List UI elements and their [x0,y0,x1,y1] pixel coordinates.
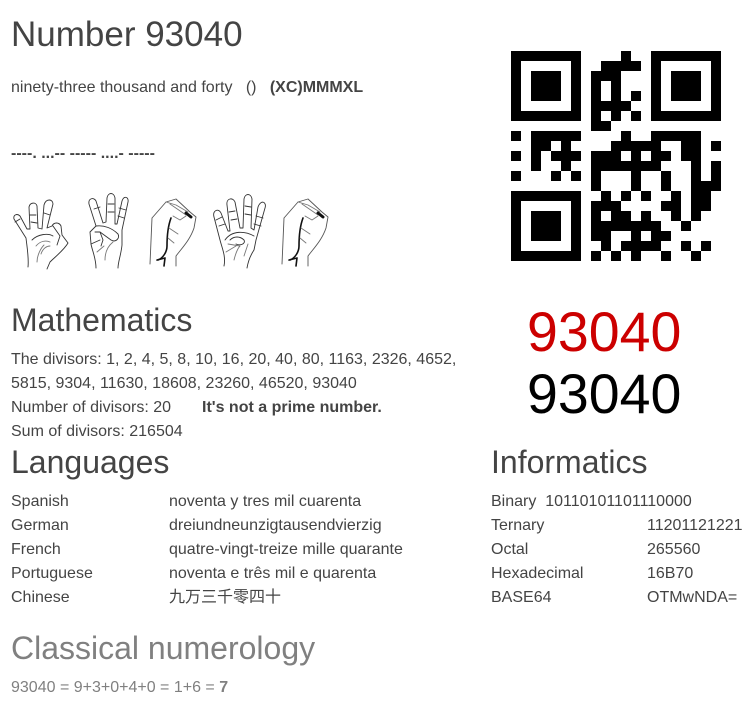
languages table: Chinese [11,589,70,606]
mathematics text: The divisors: 1, 2, 4, 5, 8, 10, 16, 20, 40, 80, 1163, 2326, 4652, [11,351,456,368]
informatics table: BASE64 [491,589,551,606]
icon: hand digit 9 [14,200,68,269]
languages table: dreiundneunzigtausendvierzig [169,517,382,534]
informatics table: 11201121221 [647,517,743,534]
icon: fist digit 0 second [282,199,328,266]
mathematics text [11,351,456,440]
numerology sum: 93040 = 9+3+0+4+0 = 1+6 = 7 [11,679,228,696]
icon: fist digit 0 [150,199,196,266]
informatics table [491,493,743,606]
number in words and roman numeral: ninety-three thousand and forty () (XC)MMMXL [11,79,363,96]
big red number: 93040 [527,301,681,363]
languages table [11,493,403,606]
sign language hands [13,193,328,270]
languages table: noventa e três mil e quarenta [169,565,376,582]
informatics table: OTMwNDA= [647,589,737,606]
informatics table: Binary 10110101101110000 [491,493,692,510]
icon: hand digit 4 [214,194,265,268]
informatics table: 265560 [647,541,700,558]
mathematics text: Sum of divisors: 216504 [11,423,183,440]
informatics table: Octal [491,541,528,558]
heading: Informatics: Informatics [491,444,647,480]
heading: Classical numerology: Classical numerology [11,630,315,666]
languages table: 九万三千零四十 [169,589,281,606]
languages table: noventa y tres mil cuarenta [169,493,361,510]
mathematics text: Number of divisors: 20 [11,399,171,416]
languages table: French [11,541,61,558]
QR code [511,51,721,261]
title: Number 93040 [11,15,243,54]
big black number: 93040 [527,363,681,425]
morse code: ----. ...-- ----- ....- ----- [11,145,155,162]
languages table: German [11,517,69,534]
informatics table: Ternary [491,517,544,534]
languages table: quatre-vingt-treize mille quarante [169,541,403,558]
mathematics text: 5815, 9304, 11630, 18608, 23260, 46520, 93040 [11,375,357,392]
heading: Languages: Languages [11,444,169,480]
heading: Mathematics: Mathematics [11,302,192,338]
mathematics text: It's not a prime number. [202,399,382,416]
languages table: Spanish [11,493,69,510]
informatics table: Hexadecimal [491,565,583,582]
informatics table: 16B70 [647,565,693,582]
languages table: Portuguese [11,565,93,582]
icon: hand digit 3 [89,194,128,268]
